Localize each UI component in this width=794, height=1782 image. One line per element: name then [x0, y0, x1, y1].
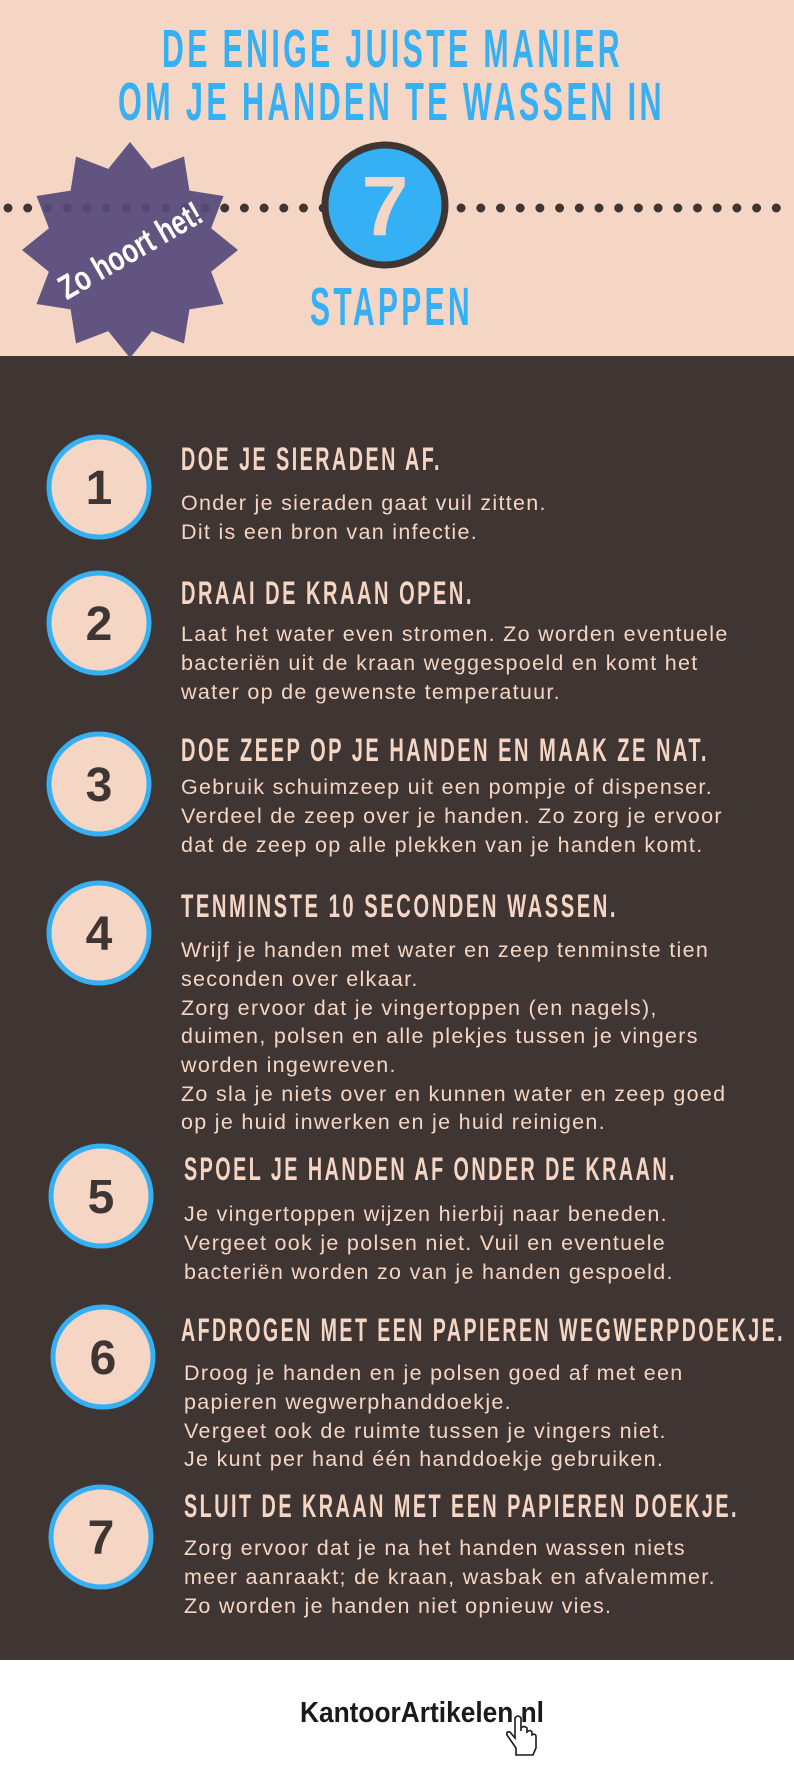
step 3: Gebruik schuimzeep uit een pompje of dispenser. — [181, 775, 713, 799]
step 3: dat de zeep op alle plekken van je handen komt. — [181, 833, 703, 857]
step 5: 5 — [88, 1171, 114, 1224]
icon: hand cursor — [507, 1716, 536, 1755]
step 4: Zo sla je niets over en kunnen water en zeep goed — [181, 1082, 726, 1106]
step 5: bacteriën worden zo van je handen gespoeld. — [184, 1260, 674, 1284]
step 6 — [53, 1307, 785, 1471]
step 7 — [51, 1487, 739, 1618]
step 6: 6 — [90, 1332, 116, 1385]
step 1 — [49, 437, 547, 544]
step 2: 2 — [86, 598, 112, 651]
step 4: Wrijf je handen met water en zeep tenminste tien — [181, 938, 709, 962]
step 4: Zorg ervoor dat je vingertoppen (en nagels), — [181, 996, 658, 1020]
step 3: Verdeel de zeep over je handen. Zo zorg je ervoor — [181, 804, 723, 828]
step 2 — [49, 573, 729, 704]
step 7: Zo worden je handen niet opnieuw vies. — [184, 1594, 612, 1618]
step 4: duimen, polsen en alle plekjes tussen je vingers — [181, 1024, 699, 1048]
step 6: Vergeet ook de ruimte tussen je vingers niet. — [184, 1419, 667, 1443]
title — [118, 19, 665, 132]
step 1: Dit is een bron van infectie. — [181, 520, 478, 544]
step 2: bacteriën uit de kraan weggespoeld en komt het — [181, 651, 699, 675]
step 6: papieren wegwerphanddoekje. — [184, 1390, 512, 1414]
step 2: DRAAI DE KRAAN OPEN. — [181, 575, 474, 611]
STAPPEN: STAPPEN — [310, 277, 473, 337]
step 4 — [49, 883, 726, 1134]
step 4: worden ingewreven. — [180, 1053, 397, 1077]
step 2: water op de gewenste temperatuur. — [180, 680, 561, 704]
badge: Zo hoort het!: Zo hoort het! — [52, 194, 209, 307]
step 4: op je huid inwerken en je huid reinigen. — [181, 1110, 606, 1134]
step 4: seconden over elkaar. — [181, 967, 419, 991]
step 3: 3 — [86, 759, 112, 812]
step 5 — [51, 1146, 677, 1284]
logo: KantoorArtikelen.nl — [300, 1697, 544, 1729]
step 5: Je vingertoppen wijzen hierbij naar beneden. — [184, 1202, 668, 1226]
step 7: Zorg ervoor dat je na het handen wassen niets — [184, 1536, 686, 1560]
badge: Zo hoort het! — [22, 142, 238, 358]
big number 7: 7 — [362, 159, 408, 253]
step 5: Vergeet ook je polsen niet. Vuil en eventuele — [184, 1231, 666, 1255]
big number 7 — [325, 145, 445, 265]
logo — [300, 1697, 544, 1755]
step 3 — [49, 732, 723, 857]
step 7: 7 — [88, 1512, 114, 1565]
step 7: meer aanraakt; de kraan, wasbak en afvalemmer. — [184, 1565, 716, 1589]
step 1: Onder je sieraden gaat vuil zitten. — [181, 491, 547, 515]
step 6: Je kunt per hand één handdoekje gebruiken. — [184, 1447, 664, 1471]
step 2: Laat het water even stromen. Zo worden eventuele — [181, 622, 729, 646]
step 4: 4 — [86, 908, 113, 961]
step 1: DOE JE SIERADEN AF. — [181, 441, 442, 477]
step 6: Droog je handen en je polsen goed af met een — [184, 1361, 683, 1385]
step 1: 1 — [86, 462, 112, 515]
